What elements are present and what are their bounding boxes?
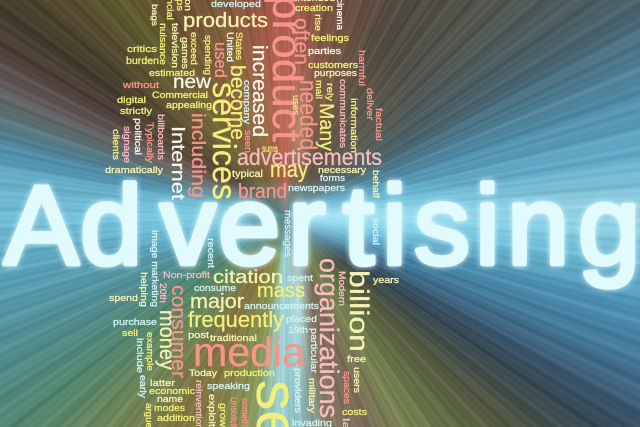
- small words: lower half: spaces: [341, 371, 352, 404]
- word: used: used: [211, 42, 230, 78]
- small words: lower half: traditional: [210, 333, 257, 344]
- word: consumer: consumer: [167, 285, 189, 378]
- small words: lower half: spent: [287, 273, 313, 284]
- small words: lower half: Today: [189, 368, 217, 379]
- word: organizations: organizations: [314, 258, 344, 418]
- small words: upper left: bags: [150, 4, 159, 26]
- word: mass: mass: [257, 280, 305, 302]
- small words: upper left: billboards: [155, 114, 166, 160]
- small words: upper right: sums: [262, 144, 278, 155]
- word: products: products: [183, 10, 268, 32]
- small words: lower half: particular: [308, 328, 319, 373]
- small words: upper right: rise: [312, 14, 323, 31]
- small words: lower half: example: [144, 332, 155, 371]
- small words: lower half: costs: [342, 407, 367, 418]
- word: money: money: [155, 310, 178, 370]
- small words: lower half: consume: [194, 283, 236, 294]
- small words: upper right: necessary: [318, 165, 366, 176]
- small words: upper right: parties: [308, 46, 341, 57]
- small words: lower half: exploit: [206, 394, 217, 427]
- small words: upper left: digital: [117, 95, 146, 106]
- small words: upper left: appealing: [166, 100, 212, 111]
- small words: lower half: providers: [292, 368, 303, 413]
- word: Many: Many: [315, 103, 337, 151]
- small words: upper left: games: [179, 37, 190, 69]
- word: including: including: [187, 113, 208, 198]
- small words: lower half: free: [347, 354, 366, 365]
- small words: upper right: factual: [373, 108, 384, 141]
- small words: upper right: creation: [295, 3, 333, 14]
- small words: upper left: Commercial: [152, 90, 208, 101]
- word: become: become: [226, 65, 248, 140]
- small words: upper right: forms: [320, 173, 345, 184]
- small words: upper left: company: [241, 80, 252, 124]
- small words: lower half: reinvention: [193, 380, 204, 427]
- small words: upper left: strictly: [120, 106, 152, 117]
- small words: lower half: economic: [149, 386, 195, 397]
- small words: lower half: years: [373, 275, 399, 286]
- word: frequently: frequently: [188, 307, 284, 332]
- word: citation: citation: [213, 267, 283, 287]
- small words: lower half: grow: [217, 403, 228, 427]
- word: media: media: [193, 329, 305, 375]
- small words: upper left: signage: [121, 126, 132, 163]
- small words: upper left: clients: [110, 129, 121, 160]
- small words: lower half: Modern: [336, 271, 347, 306]
- small words: lower half: placed: [286, 314, 317, 325]
- small words: lower half: sell: [122, 328, 138, 339]
- small words: upper right: purposes: [314, 68, 357, 79]
- small words: lower half: 20th: [157, 283, 168, 303]
- small words: lower half: modes: [154, 403, 185, 414]
- small words: upper right: customers: [308, 60, 358, 71]
- small words: upper left: nuisance: [157, 23, 168, 65]
- small words: upper left: typical: [232, 169, 263, 180]
- small words: upper left: political: [132, 118, 143, 155]
- small words: upper left: spending: [202, 35, 213, 75]
- small words: upper left: exceed: [188, 32, 199, 65]
- small words: lower half: image marketing: [149, 230, 160, 307]
- word: may: may: [270, 156, 308, 182]
- word: new: new: [173, 72, 211, 93]
- small words: upper right: messages: [282, 210, 293, 257]
- small words: upper right: rely: [324, 83, 335, 101]
- small words: lower half: addition: [157, 413, 195, 424]
- small words: upper left: burden: [126, 55, 159, 67]
- word: increased: increased: [248, 45, 270, 137]
- small words: upper right: uses: [290, 95, 301, 115]
- small words: lower half: la: [340, 418, 351, 427]
- small words: upper left: [105, 0, 263, 180]
- small words: upper left: Typically: [144, 122, 155, 163]
- small words: upper right: behalf: [370, 170, 381, 198]
- small words: lower half: latter: [150, 378, 175, 389]
- small words: lower half: name: [157, 394, 183, 405]
- small words: upper left: dramatically: [105, 165, 163, 176]
- small words: upper right: newspapers: [288, 183, 345, 194]
- small words: upper left: without: [122, 80, 159, 91]
- word: major: major: [190, 291, 244, 313]
- small words: upper left: States: [233, 32, 244, 60]
- small words: upper left: seen: [242, 130, 253, 153]
- small words: upper right: [262, 0, 384, 257]
- word: often: often: [290, 18, 312, 65]
- small words: lower half: [109, 230, 399, 427]
- small words: lower half: Non-profit: [163, 270, 210, 281]
- word: advertisements: advertisements: [237, 144, 382, 170]
- small words: lower half: include: [134, 338, 145, 373]
- small words: lower half: users: [351, 367, 362, 393]
- small words: upper right: mail: [313, 80, 324, 99]
- small words: upper left: television: [169, 23, 180, 68]
- small words: upper right: information: [348, 98, 359, 153]
- small words: lower half: argue: [143, 403, 154, 427]
- small words: lower half: spend: [109, 293, 138, 304]
- word: needed: needed: [294, 80, 321, 150]
- small words: upper right: communicates: [337, 79, 348, 148]
- small words: upper right: harmful: [356, 50, 367, 86]
- small words: lower half: production: [224, 368, 275, 379]
- small words: lower half: purchase: [113, 317, 157, 328]
- small words: upper left: critics: [127, 44, 157, 55]
- small words: lower half: military: [306, 378, 317, 413]
- small words: lower half: speaking: [207, 381, 250, 392]
- small words: upper right: social: [370, 218, 381, 245]
- small words: lower half: 19th: [288, 325, 308, 336]
- small words: upper right: feelings: [311, 33, 349, 44]
- small words: upper right: deliver: [364, 88, 375, 120]
- title: Advertising: Advertising: [4, 163, 640, 288]
- small words: lower half: helping: [138, 272, 149, 307]
- small words: lower half: post: [188, 330, 209, 341]
- word: brand: brand: [238, 181, 287, 203]
- word: billion: billion: [344, 270, 374, 352]
- small words: lower half: early: [137, 375, 148, 398]
- small words: lower half: recent: [205, 238, 216, 268]
- small words: upper left: estimated: [149, 68, 195, 79]
- word: services: services: [206, 82, 243, 200]
- small words: upper left: United: [224, 32, 235, 62]
- word: Internet: Internet: [168, 126, 188, 200]
- word cloud: all words: [105, 0, 399, 427]
- small words: lower half: announcements: [244, 301, 319, 312]
